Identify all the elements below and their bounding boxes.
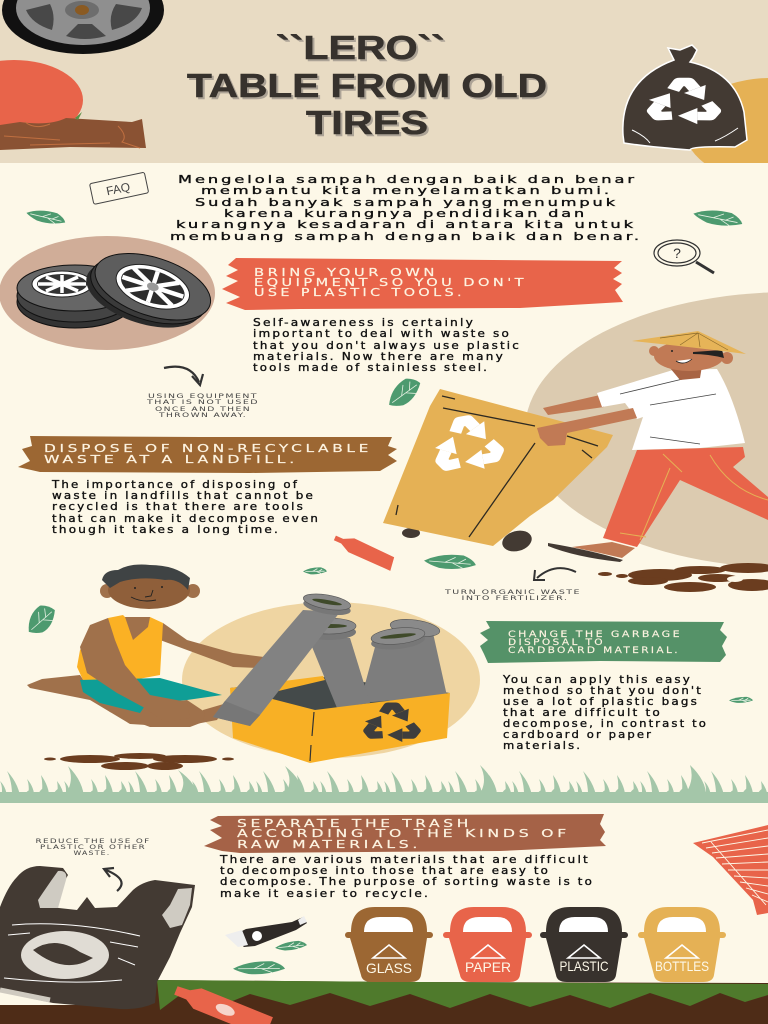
text: self-awareness: materials. Now there are many — [253, 350, 505, 363]
banner: dispose landfill: DISPOSE OF NON-RECYCLABLE — [44, 443, 372, 455]
banner: dispose landfill — [18, 436, 397, 473]
middle pipe — [308, 637, 370, 708]
banner: bring your own equipment: EQUIPMENT SO YOU DON'T — [254, 277, 527, 289]
caption: using equipment: THAT IS NOT USED — [146, 398, 259, 406]
back arm — [543, 395, 604, 415]
bin: bottles — [638, 907, 726, 982]
icon: trash bag with recycle symbol — [623, 45, 747, 150]
bin: plastic: PLASTIC — [560, 958, 608, 974]
arrow: curved left — [534, 568, 576, 580]
icon: leaf center — [382, 373, 425, 412]
panel: beige circle behind man — [525, 292, 768, 568]
compost pile left — [44, 753, 234, 770]
icon: small red bottle — [332, 531, 396, 571]
compost pile right — [598, 563, 768, 592]
bin: plastic — [540, 907, 628, 982]
panel: tires illustration — [0, 236, 219, 350]
banner: bring your own equipment — [222, 258, 623, 310]
banner: change garbage disposal: CARDBOARD MATERIAL. — [508, 646, 680, 656]
icon: FAQ note — [90, 172, 149, 204]
text: cardboard body: materials. — [503, 739, 582, 752]
left arm — [80, 618, 190, 722]
text: cardboard body — [502, 673, 708, 752]
text: landfill body: though it takes a long time. — [52, 523, 280, 536]
text: cardboard body: use a lot of plastic bags — [503, 695, 699, 708]
text: self-awareness: important to deal with waste so — [253, 327, 511, 340]
banner: change garbage disposal — [480, 621, 727, 663]
caption: using equipment — [146, 392, 259, 419]
text: cardboard body: cardboard or paper — [503, 728, 653, 741]
box interior — [230, 677, 450, 712]
bin: glass — [345, 907, 433, 982]
text: separate body: make it easier to recycle. — [220, 887, 430, 900]
banner: bring your own equipment: USE PLASTIC TOOLS. — [254, 287, 465, 299]
caption: reduce plastic: PLASTIC OR OTHER — [40, 843, 146, 851]
grass strip — [0, 765, 768, 803]
illustration: plastic bag — [0, 866, 195, 1009]
icon: car tire top — [2, 0, 164, 54]
bin: paper — [443, 907, 532, 982]
shorts — [80, 678, 222, 713]
text: separate body: to decompose into those that are easy to — [220, 864, 550, 877]
front arm and hand — [537, 408, 637, 446]
text: separate body — [219, 853, 594, 900]
banner: bring your own equipment: BRING YOUR OWN — [254, 267, 438, 279]
icon: leaf left mid — [20, 600, 61, 639]
text: landfill body: that can make it decompose even — [52, 512, 320, 525]
banner: separate trash: ACCORDING TO THE KINDS OF — [237, 828, 570, 840]
banner: separate trash — [204, 814, 606, 853]
icon: leaning tire — [78, 239, 219, 342]
text: self-awareness: tools made of stainless steel. — [253, 361, 489, 374]
icon: dark bottle — [225, 916, 307, 947]
title: TIRES — [306, 104, 428, 141]
caption: organic waste: INTO FERTILIZER. — [462, 594, 568, 602]
arrow: curved up left — [104, 868, 122, 891]
intro text: membantu kita menyelamatkan bumi. — [201, 184, 612, 197]
foot and sandal — [572, 542, 635, 558]
conical hat — [632, 331, 746, 354]
caption: reduce plastic: REDUCE THE USE OF — [36, 837, 150, 845]
text: landfill body: The importance of disposing of — [51, 478, 299, 491]
intro text: Sudah banyak sampah yang menumpuk — [195, 196, 618, 209]
head — [100, 565, 200, 609]
long pipe — [213, 610, 340, 726]
tank top — [77, 615, 163, 680]
box front — [230, 688, 450, 763]
illustration: man pushing bin — [383, 331, 768, 562]
icon: red woven mat — [693, 825, 768, 915]
text: landfill body — [51, 478, 320, 536]
caption: using equipment: USING EQUIPMENT — [148, 392, 258, 400]
banner: dispose landfill: WASTE AT A LANDFILL. — [44, 454, 298, 466]
arrow: curved down right — [164, 367, 203, 385]
text: self-awareness: that you don't always use plastic — [253, 339, 521, 352]
icon: leaf left — [25, 206, 67, 228]
icon: red bottle on ground — [172, 980, 273, 1024]
caption: organic waste — [444, 588, 581, 602]
text: self-awareness — [253, 316, 521, 374]
caption: organic waste: TURN ORGANIC WASTE — [444, 588, 581, 596]
text: separate body: decompose. The purpose of sorting waste is to — [220, 875, 594, 888]
intro text: kurangnya kesadaran di antara kita untuk — [176, 218, 636, 231]
ground — [0, 980, 768, 1024]
icon: magnifier question: ? — [673, 245, 681, 261]
icon: leaf right — [692, 205, 744, 230]
title — [187, 29, 547, 141]
intro text: karena kurangnya pendidikan dan — [224, 207, 587, 220]
shirt — [597, 369, 745, 450]
intro text — [170, 173, 642, 243]
intro text: membuang sampah dengan baik dan benar. — [170, 230, 642, 243]
icon: FAQ note: FAQ — [105, 180, 131, 198]
text: cardboard body: decompose, in contrast to — [503, 717, 708, 730]
intro text: Mengelola sampah dengan baik dan benar — [178, 173, 637, 186]
text: landfill body: recycled is that there are tools — [52, 500, 305, 513]
right arm — [160, 623, 264, 668]
bin: glass: GLASS — [366, 960, 412, 976]
caption: reduce plastic: WASTE. — [74, 849, 110, 857]
banner: separate trash: SEPARATE THE TRASH — [237, 818, 472, 830]
text: cardboard body: that are difficult to — [503, 706, 662, 719]
head — [632, 331, 746, 380]
wheelie bin — [383, 389, 613, 555]
title: ``LERO`` — [276, 29, 445, 66]
banner: change garbage disposal: DISPOSAL TO — [508, 638, 605, 648]
icon: leaf by dark bottle — [275, 940, 307, 952]
icon: small leaf — [303, 567, 327, 574]
caption: using equipment: ONCE AND THEN — [155, 405, 251, 413]
caption: reduce plastic — [36, 837, 150, 857]
icon: stacked tire — [17, 265, 133, 328]
icon: magnifier question — [654, 240, 714, 273]
legs — [27, 675, 227, 727]
icon: leaf below bottle — [233, 961, 285, 974]
back pipes — [360, 628, 447, 703]
title: TABLE FROM OLD — [187, 67, 547, 104]
caption: using equipment: THROWN AWAY. — [158, 411, 247, 419]
pants — [603, 447, 768, 547]
bin: bottles: BOTTLES — [655, 958, 709, 974]
banner: change garbage disposal: CHANGE THE GARBAGE — [508, 630, 682, 640]
text: landfill body: waste in landfills that cannot be — [52, 489, 315, 502]
text: cardboard body: You can apply this easy — [502, 673, 692, 686]
icon: tiny leaf — [729, 697, 753, 703]
icon: wooden log — [0, 112, 146, 150]
icon: red sun — [0, 60, 83, 140]
illustration: boy — [27, 565, 264, 727]
banner: separate trash: RAW MATERIALS. — [237, 839, 421, 851]
text: self-awareness: Self-awareness is certainly — [253, 316, 475, 329]
bin: paper: PAPER — [465, 959, 511, 975]
icon: leaf under bin — [423, 552, 477, 571]
illustration: pipe table in cardboard box — [213, 591, 450, 763]
text: separate body: There are various materials that are difficult — [219, 853, 590, 866]
text: cardboard body: method so that you don't — [503, 684, 703, 697]
recycle symbol on box — [362, 706, 418, 743]
icon: orange circle behind bag — [691, 78, 768, 163]
panel: header band — [0, 0, 768, 163]
panel: tan circle behind table — [182, 602, 480, 758]
